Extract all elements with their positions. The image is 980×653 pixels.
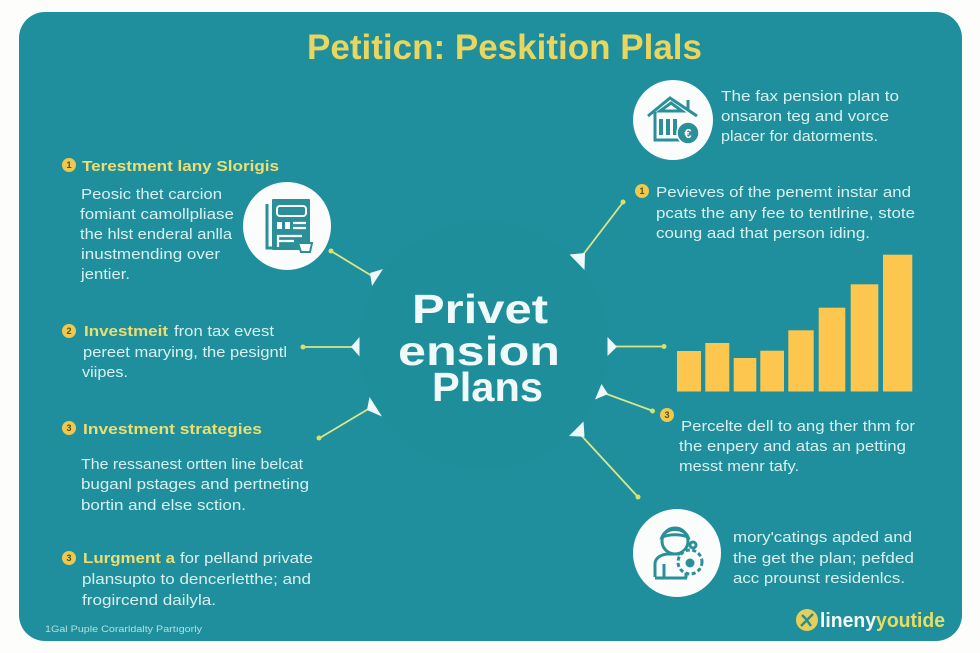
right top text: The fax pension plan to [721,88,899,105]
number badge right 1: 1 [639,186,645,196]
item 4 text: frogircend dailyla. [82,592,216,609]
number badge 4: 3 [66,553,72,563]
number badge 3 [62,421,76,435]
central heading [398,286,560,410]
logo mark [796,609,818,631]
right bottom text: the get the plan; pefded [733,550,914,567]
item 2 text [82,323,287,381]
right item 1 text: coung aad that person iding. [656,225,870,242]
item 1 heading: Terestment lany Slorigis [82,158,279,175]
item 4 text [82,550,313,609]
title: Petiticn: Peskition Plals [307,28,702,67]
central hub disc [360,221,608,469]
arrow: left item 2 to hub [300,337,360,356]
logo [796,609,945,632]
footer note: 1Gal Puple Corarldalty Partıgorly [45,624,202,635]
right top text: onsaron teg and vorce [721,108,889,125]
logo wordmark: linenyyoutide [820,610,945,632]
number badge right 3: 3 [664,410,670,420]
item 4 text: Lurgment a [83,550,176,567]
item 1 text: jentier. [80,266,130,283]
item 1 text: fomiant camollpliase [80,206,234,223]
item 3 text [81,456,309,514]
number badge 2 [62,324,76,338]
item 1 text: Peosic thet carcion [81,186,222,203]
arrow: hub to bottom person item [569,422,640,500]
panel: left item 3 [62,421,309,514]
arrow: left item 3 to hub [316,397,382,440]
number badge 3: 3 [66,423,72,433]
number badge right 3 [660,408,674,422]
icon: bank house with coin [633,80,713,160]
item 1 text: the hlst enderal anlla [80,226,233,243]
panel: left item 1 [62,158,331,283]
item 4 text: plansupto to dencerletthe; and [82,571,311,588]
right item 3 text: messt menr tafy. [679,458,799,475]
item 2 text: viipes. [82,364,128,381]
panel: right item 3 [660,408,915,475]
number badge 1: 1 [66,160,72,170]
panel: right top item [633,80,899,160]
central heading: Privet [412,286,548,332]
right top text [721,88,899,145]
item 2 text: Investmeit [84,323,168,340]
item 2 text: fron tax evest [174,323,275,340]
item 1 text [80,186,234,283]
panel: right item 1 [635,184,915,242]
right bottom text: mory'catings apded and [733,529,912,546]
number badge 1 [62,158,76,172]
icon: person with coins [633,509,721,597]
right item 1 text: pcats the any fee to tentlrine, stote [656,205,915,222]
right item 1 text [656,184,915,242]
icon: bank house with coin: € [684,126,692,141]
item 4 text: for pelland private [180,550,313,567]
right item 1 text: Pevieves of the penemt instar and [656,184,911,201]
right top text: placer for datorments. [721,128,878,145]
arrow: hub to bar chart [608,337,666,356]
item 2 text: pereet marying, the pesigntl [83,344,287,361]
right bottom text [733,529,914,587]
item 1 text: inustmending over [81,246,220,263]
item 3 heading: Investment strategies [83,421,262,438]
number badge 4 [62,551,76,565]
central heading: Plans [432,364,543,410]
right item 3 text [679,418,915,475]
right bottom text: acc prounst residenlcs. [733,570,905,587]
panel: left item 2 [62,323,287,381]
number badge right 1 [635,184,649,198]
item 3 text: buganl pstages and pertneting [81,476,309,493]
panel: right bottom item [633,509,914,597]
right item 3 text: Percelte dell to ang ther thm for [681,418,915,435]
bar chart [677,255,912,392]
number badge 2: 2 [66,326,72,336]
arrow: hub to right item 3 [595,384,655,414]
arrow: document to hub [328,248,383,286]
right item 3 text: the enpery and atas an petting [679,438,906,455]
arrow: hub to right item 1 [570,200,626,270]
item 3 text: The ressanest ortten line belcat [81,456,304,473]
icon: document [243,182,331,270]
central heading: ension [398,328,560,374]
item 3 text: bortin and else sction. [81,497,246,514]
panel: left item 4 [62,550,313,609]
